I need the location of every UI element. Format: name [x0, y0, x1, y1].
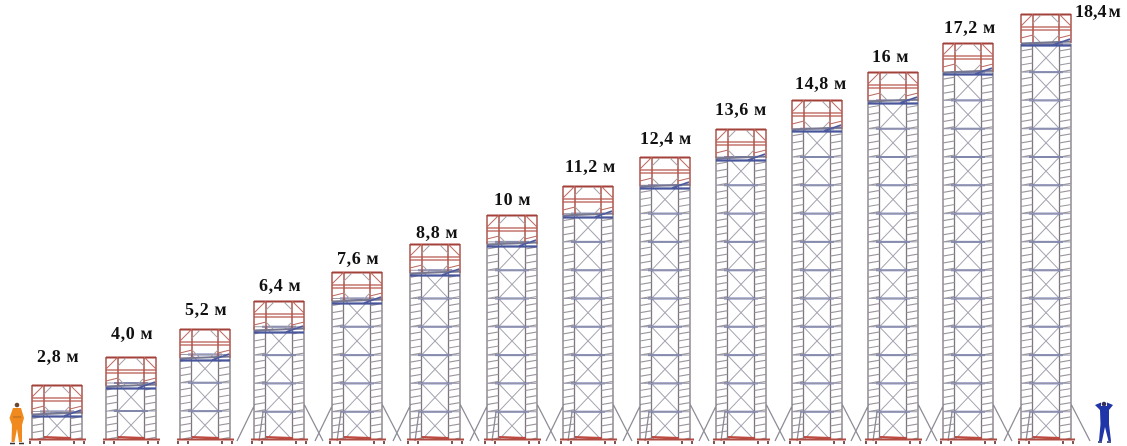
- tower: 2,8 m: [29, 385, 86, 444]
- label: 12,4 m: 12,4 м: [640, 128, 692, 148]
- tower: 6,4 m: [237, 301, 323, 444]
- icon: worker in blue: [1095, 402, 1113, 442]
- icon: worker in orange: [10, 403, 24, 444]
- tower: 12,4 m: [623, 157, 709, 444]
- label: 8,8 m: 8,8 м: [416, 222, 458, 242]
- tower: 16 m: [851, 72, 937, 444]
- label: 18,4 m: 18,4 м: [1075, 1, 1121, 21]
- label: 14,8 m: 14,8 м: [795, 73, 847, 93]
- tower: 17,2 m: [926, 43, 1012, 444]
- label: 17,2 m: 17,2 м: [944, 17, 996, 37]
- tower: 8,8 m: [393, 244, 479, 444]
- tower: 10 m: [470, 215, 556, 444]
- label: 10 m: 10 м: [494, 189, 531, 209]
- tower: 7,6 m: [315, 272, 401, 444]
- label: 5,2 m: 5,2 м: [185, 299, 227, 319]
- tower: 13,6 m: [699, 129, 785, 444]
- label: 11,2 m: 11,2 м: [565, 156, 616, 176]
- label: 2,8 m: 2,8 м: [37, 346, 79, 366]
- tower: 14,8 m: [775, 100, 861, 444]
- tower: 5,2 m: [177, 329, 234, 444]
- label: 7,6 m: 7,6 м: [337, 248, 379, 268]
- tower: 4,0 m: [103, 357, 160, 444]
- label: 13,6 m: 13,6 м: [715, 99, 767, 119]
- label: 6,4 m: 6,4 м: [259, 275, 301, 295]
- label: 16 m: 16 м: [872, 46, 909, 66]
- tower: 11,2 m: [546, 186, 632, 444]
- tower: 18,4 m: [1004, 14, 1090, 444]
- label: 4,0 m: 4,0 м: [111, 323, 153, 343]
